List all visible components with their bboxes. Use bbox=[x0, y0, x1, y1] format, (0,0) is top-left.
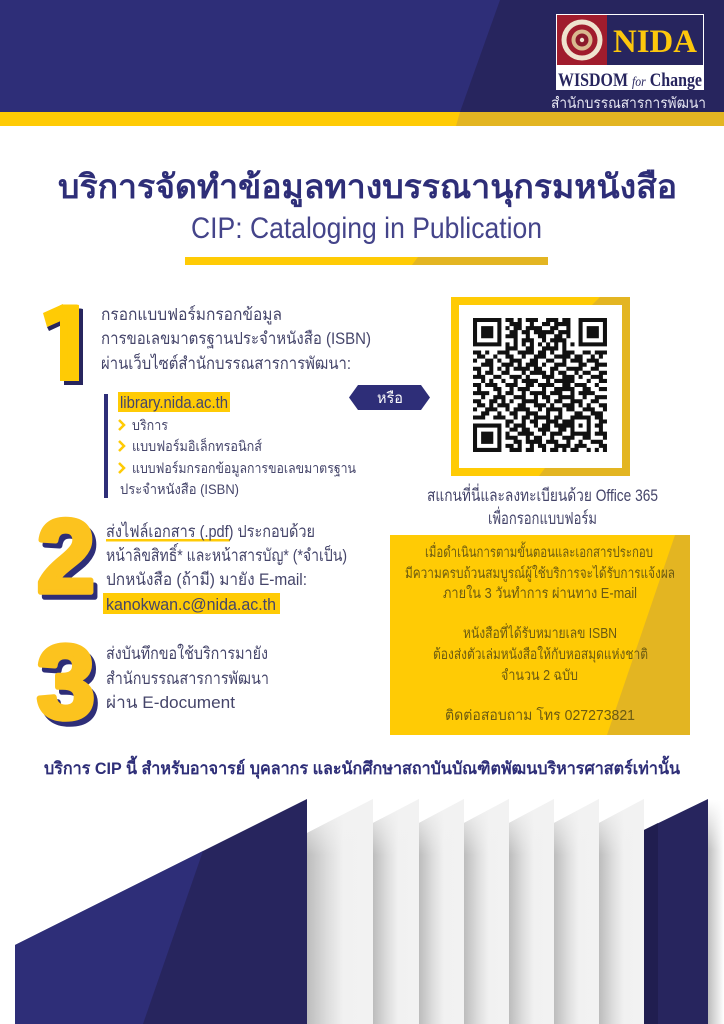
notice panel bbox=[390, 535, 690, 735]
notice text: จำนวน 2 ฉบับ bbox=[501, 668, 578, 684]
QR caption bbox=[427, 483, 658, 528]
QR code panel bbox=[451, 297, 630, 476]
step 3 bbox=[37, 625, 269, 746]
header band bbox=[0, 0, 724, 126]
step 3 text: ผ่าน E-document bbox=[106, 693, 235, 712]
notice text: ภายใน 3 วันทำการ ผ่านทาง E-mail bbox=[443, 584, 637, 602]
step 2 text bbox=[103, 521, 347, 614]
website path list: บริการ bbox=[132, 417, 168, 433]
number 1 bbox=[43, 304, 83, 385]
NIDA logo: NIDA bbox=[613, 24, 697, 60]
notice text: หนังสือที่ได้รับหมายเลข ISBN bbox=[463, 623, 617, 642]
step 2 text: ปกหนังสือ (ถ้ามี) มายัง E-mail: bbox=[106, 570, 307, 589]
step 2 text: หน้าลิขสิทธิ์* และหน้าสารบัญ* (*จำเป็น) bbox=[106, 543, 347, 565]
number 2: 2 bbox=[37, 499, 95, 615]
notice text: เมื่อดำเนินการตามขั้นตอนและเอกสารประกอบ bbox=[425, 541, 653, 561]
title rule bbox=[185, 257, 548, 265]
title: บริการจัดทำข้อมูลทางบรรณานุกรมหนังสือ bbox=[58, 168, 677, 208]
QR caption: สแกนที่นี่และลงทะเบียนด้วย Office 365 bbox=[427, 483, 658, 505]
step 1 bbox=[38, 288, 371, 498]
step 2 bbox=[37, 499, 347, 620]
step 1 text: การขอเลขมาตรฐานประจำหนังสือ (ISBN) bbox=[101, 329, 371, 349]
notice text bbox=[405, 541, 675, 724]
step 3 text: ส่งบันทึกขอใช้บริการมายัง bbox=[106, 643, 268, 663]
NIDA logo bbox=[556, 14, 704, 91]
number 3: 3 bbox=[41, 630, 99, 746]
bottom right navy strip bbox=[644, 799, 724, 1024]
website path list: ประจำหนังสือ (ISBN) bbox=[120, 481, 239, 497]
number 1: 1 bbox=[38, 288, 96, 404]
subtitle: CIP: Cataloging in Publication bbox=[191, 212, 542, 245]
step 1 text: ผ่านเว็บไซต์สำนักบรรณสารการพัฒนา: bbox=[101, 352, 351, 373]
step 3 text bbox=[106, 643, 269, 712]
bottom navy shape bbox=[15, 799, 307, 1024]
step 1 text: กรอกแบบฟอร์มกรอกข้อมูล bbox=[101, 305, 282, 325]
notice text: ติดต่อสอบถาม โทร 027273821 bbox=[445, 706, 635, 724]
bottom pleated strips bbox=[307, 799, 644, 1024]
eligibility note: บริการ CIP นี้ สำหรับอาจารย์ บุคลากร และนักศึกษาสถาบันบัณฑิตพัฒนบริหารศาสตร์เท่านั้น bbox=[44, 755, 680, 779]
step 2 text: ส่งไฟล์เอกสาร (.pdf) ประกอบด้วย bbox=[106, 521, 315, 541]
step 3 text: สำนักบรรณสารการพัฒนา bbox=[106, 669, 269, 688]
number 2: 2 bbox=[41, 504, 99, 620]
NIDA logo: WISDOM for Change bbox=[558, 70, 702, 91]
website path list: แบบฟอร์มอิเล็กทรอนิกส์ bbox=[132, 437, 262, 454]
step 1 text bbox=[101, 305, 371, 373]
QR caption: เพื่อกรอกแบบฟอร์ม bbox=[488, 506, 597, 528]
website path list: แบบฟอร์มกรอกข้อมูลการขอเลขมาตรฐาน bbox=[132, 460, 356, 477]
website path list: library.nida.ac.th bbox=[120, 393, 228, 412]
or badge bbox=[349, 385, 430, 410]
website path list bbox=[104, 392, 356, 498]
or badge: หรือ bbox=[377, 390, 403, 407]
QR code bbox=[473, 320, 607, 450]
notice text: ต้องส่งตัวเล่มหนังสือให้กับหอสมุดแห่งชาติ bbox=[433, 645, 648, 663]
library name: สำนักบรรณสารการพัฒนา bbox=[551, 95, 706, 112]
number 3: 3 bbox=[37, 625, 95, 741]
step 2 text: kanokwan.c@nida.ac.th bbox=[106, 595, 276, 614]
number 1: 1 bbox=[42, 292, 100, 408]
